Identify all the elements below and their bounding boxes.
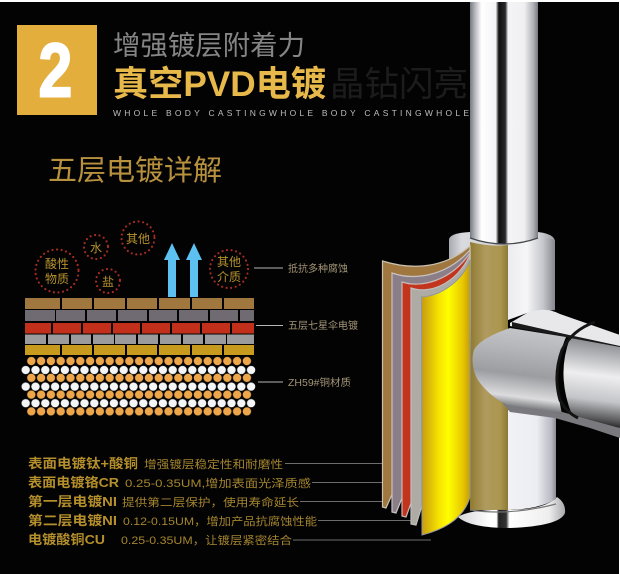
faucet: spout underside xyxy=(500,400,620,438)
icon: upward arrows xyxy=(164,243,202,297)
row: second nickel layer xyxy=(28,513,317,528)
bubble: acidic substances: 酸性 xyxy=(45,256,69,271)
faucet: upper silver body xyxy=(508,236,555,320)
bubble: acidic substances: 物质 xyxy=(45,272,69,286)
leader lines xyxy=(285,463,431,540)
plating layer: yellow xyxy=(422,260,470,535)
layer: gold xyxy=(25,345,254,355)
section heading: 五层电镀详解 xyxy=(48,155,222,187)
bubble: other xyxy=(122,222,154,254)
faucet: main pipe xyxy=(470,2,538,244)
title xyxy=(113,65,468,104)
faucet: lower silver body xyxy=(508,410,556,510)
bubble: water: 水 xyxy=(90,241,102,255)
faucet: spout left section xyxy=(473,328,566,414)
row: titanium + acid copper xyxy=(28,456,283,471)
layer: red xyxy=(25,323,254,334)
faucet: flange base xyxy=(458,497,565,528)
layer: brown xyxy=(25,298,254,309)
callout: ZH59 copper xyxy=(258,376,351,389)
title: 晶钻闪亮 xyxy=(330,66,468,104)
faucet: spout neck xyxy=(510,310,620,350)
tagline: WHOLE BODY CASTINGWHOLE BODY CASTINGWHOLE xyxy=(113,108,469,118)
plating layer: red xyxy=(402,253,470,517)
plating layer: brown xyxy=(382,246,470,508)
row: titanium + acid copper: 表面电镀钛+酸铜 xyxy=(28,456,138,471)
row: second nickel layer: 0.12-0.15UM，增加产品抗腐蚀性能 xyxy=(123,514,317,528)
callout: corrosion resistance xyxy=(254,262,348,275)
callout: ZH59 copper: ZH59#铜材质 xyxy=(288,376,351,389)
row: first nickel layer: 提供第二层保护，使用寿命延长 xyxy=(122,495,299,509)
layer: grey xyxy=(25,334,254,344)
bubble: salt: 盐 xyxy=(102,275,114,289)
row: chromium: 0.25-0.35UM,增加表面光泽质感 xyxy=(125,476,311,490)
diagram: copper substrate balls xyxy=(21,357,256,416)
row: chromium xyxy=(28,475,311,490)
plating layer: purple grey xyxy=(392,250,470,513)
row: titanium + acid copper: 增强镀层稳定性和耐磨性 xyxy=(144,457,283,471)
row: first nickel layer xyxy=(28,494,299,509)
diagram: plating brick layers xyxy=(25,298,254,355)
row: chromium: 表面电镀铬CR xyxy=(28,475,120,490)
layer: grey purple xyxy=(25,310,254,321)
row: acid copper: 0.25-0.35UM，让镀层紧密结合 xyxy=(121,533,292,547)
bubbles: corrosive agents xyxy=(36,222,248,293)
faucet xyxy=(449,2,620,528)
faucet: collar xyxy=(449,232,555,262)
bubble: other media: 其他 xyxy=(217,255,241,269)
title: 真空PVD电镀 xyxy=(113,65,326,104)
layer descriptions xyxy=(28,456,317,547)
plating layer: grey xyxy=(411,255,470,525)
bubble: other media xyxy=(210,250,248,288)
bubble: water xyxy=(84,235,108,259)
badge: number 2: 2 xyxy=(38,28,72,113)
faucet: dark ring xyxy=(557,322,595,418)
row: first nickel layer: 第一层电镀NI xyxy=(28,494,117,509)
row: acid copper: 电镀酸铜CU xyxy=(28,532,105,547)
bubble: other: 其他 xyxy=(126,232,150,246)
faucet: spout right section xyxy=(563,338,620,428)
callout: corrosion resistance: 抵抗多种腐蚀 xyxy=(288,262,348,275)
bubble: acidic substances xyxy=(36,250,78,292)
row: second nickel layer: 第二层电镀NI xyxy=(28,513,117,528)
bubble: other media: 介质 xyxy=(217,270,241,284)
badge: number 2 xyxy=(17,25,97,115)
bubble: salt xyxy=(96,269,120,293)
row: acid copper xyxy=(28,532,292,547)
faucet: olive cutaway xyxy=(470,242,508,510)
cutaway plating layers xyxy=(382,246,470,535)
subtitle: 增强镀层附着力 xyxy=(113,31,305,61)
callout: five layer plating xyxy=(256,319,358,332)
callout: five layer plating: 五层七星伞电镀 xyxy=(288,319,358,332)
